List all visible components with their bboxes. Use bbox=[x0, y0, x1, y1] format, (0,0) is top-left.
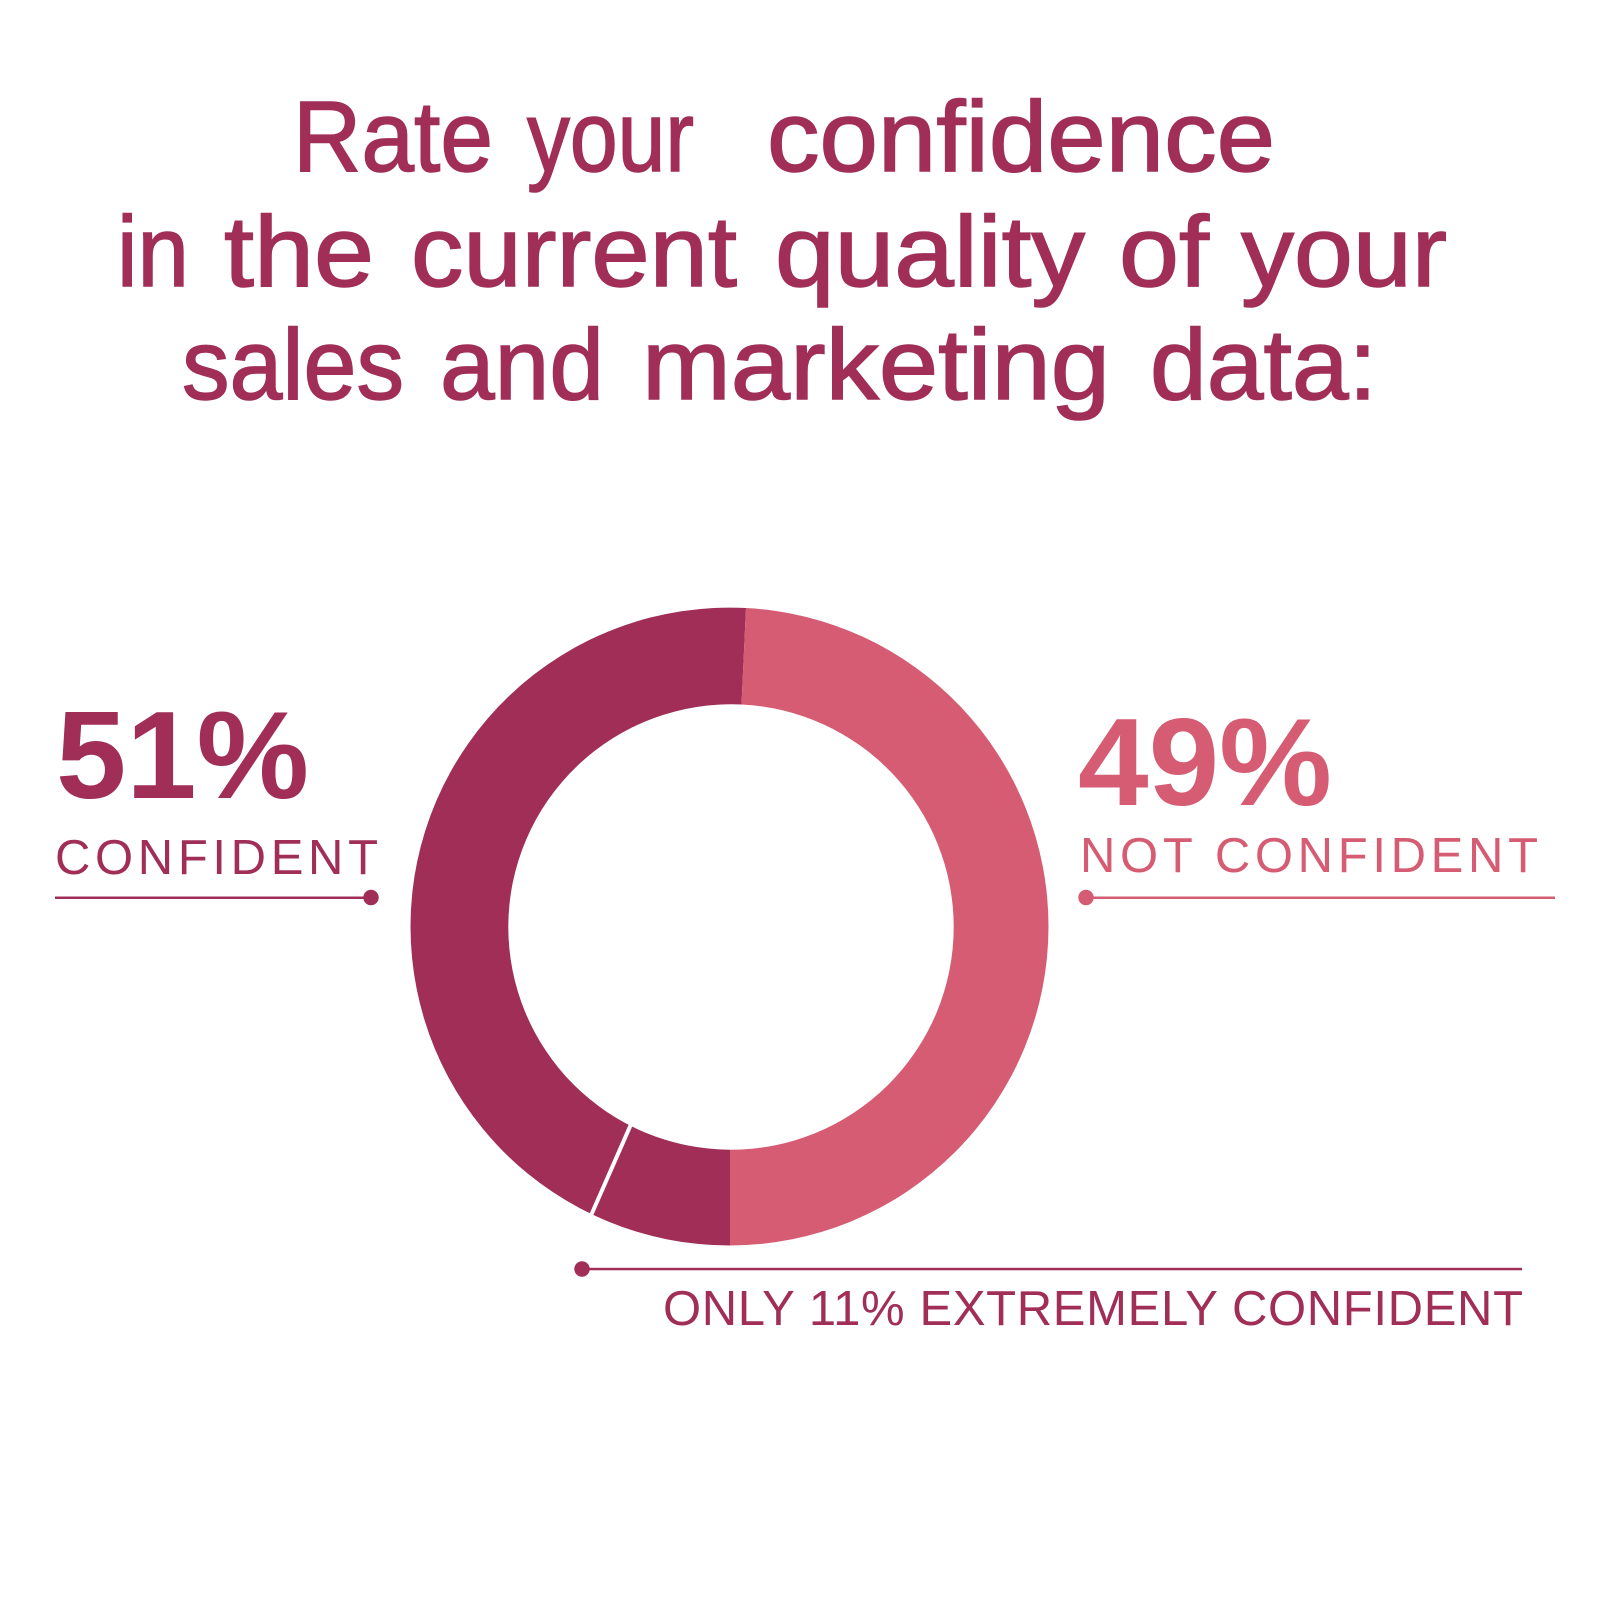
label: only 11% extremely confident: ONLY 11% EXTREMELY CONFIDENT bbox=[663, 1282, 1523, 1336]
value: 51%: 51% bbox=[56, 687, 309, 825]
callout: only 11% extremely confident bbox=[574, 1261, 1523, 1336]
title: marketing bbox=[642, 309, 1110, 421]
title: your bbox=[1241, 196, 1447, 308]
title: your bbox=[527, 81, 694, 193]
segment: confident 51% bbox=[410, 608, 746, 1246]
title: data: bbox=[1150, 309, 1377, 421]
title: sales bbox=[182, 309, 404, 421]
title: the bbox=[224, 196, 374, 308]
leader line bbox=[55, 890, 379, 905]
donut chart bbox=[410, 608, 1048, 1246]
label: confident: CONFIDENT bbox=[55, 831, 378, 885]
leader line bbox=[574, 1261, 1522, 1277]
leader line bbox=[1078, 890, 1555, 905]
callout: 51% confident bbox=[55, 687, 379, 905]
label: not confident: NOT CONFIDENT bbox=[1080, 829, 1538, 883]
title: confidence bbox=[767, 81, 1275, 193]
title: in bbox=[117, 196, 189, 308]
callout: 49% not confident bbox=[1078, 694, 1555, 905]
title: current bbox=[411, 196, 737, 308]
divider: extremely confident slice bbox=[589, 1122, 632, 1220]
title: quality bbox=[775, 196, 1085, 308]
segment: not confident 49% bbox=[730, 608, 1048, 1246]
title bbox=[117, 81, 1447, 421]
title: and bbox=[440, 309, 604, 421]
title: Rate bbox=[293, 81, 493, 193]
value: 49%: 49% bbox=[1078, 694, 1332, 832]
title: of bbox=[1119, 196, 1209, 308]
